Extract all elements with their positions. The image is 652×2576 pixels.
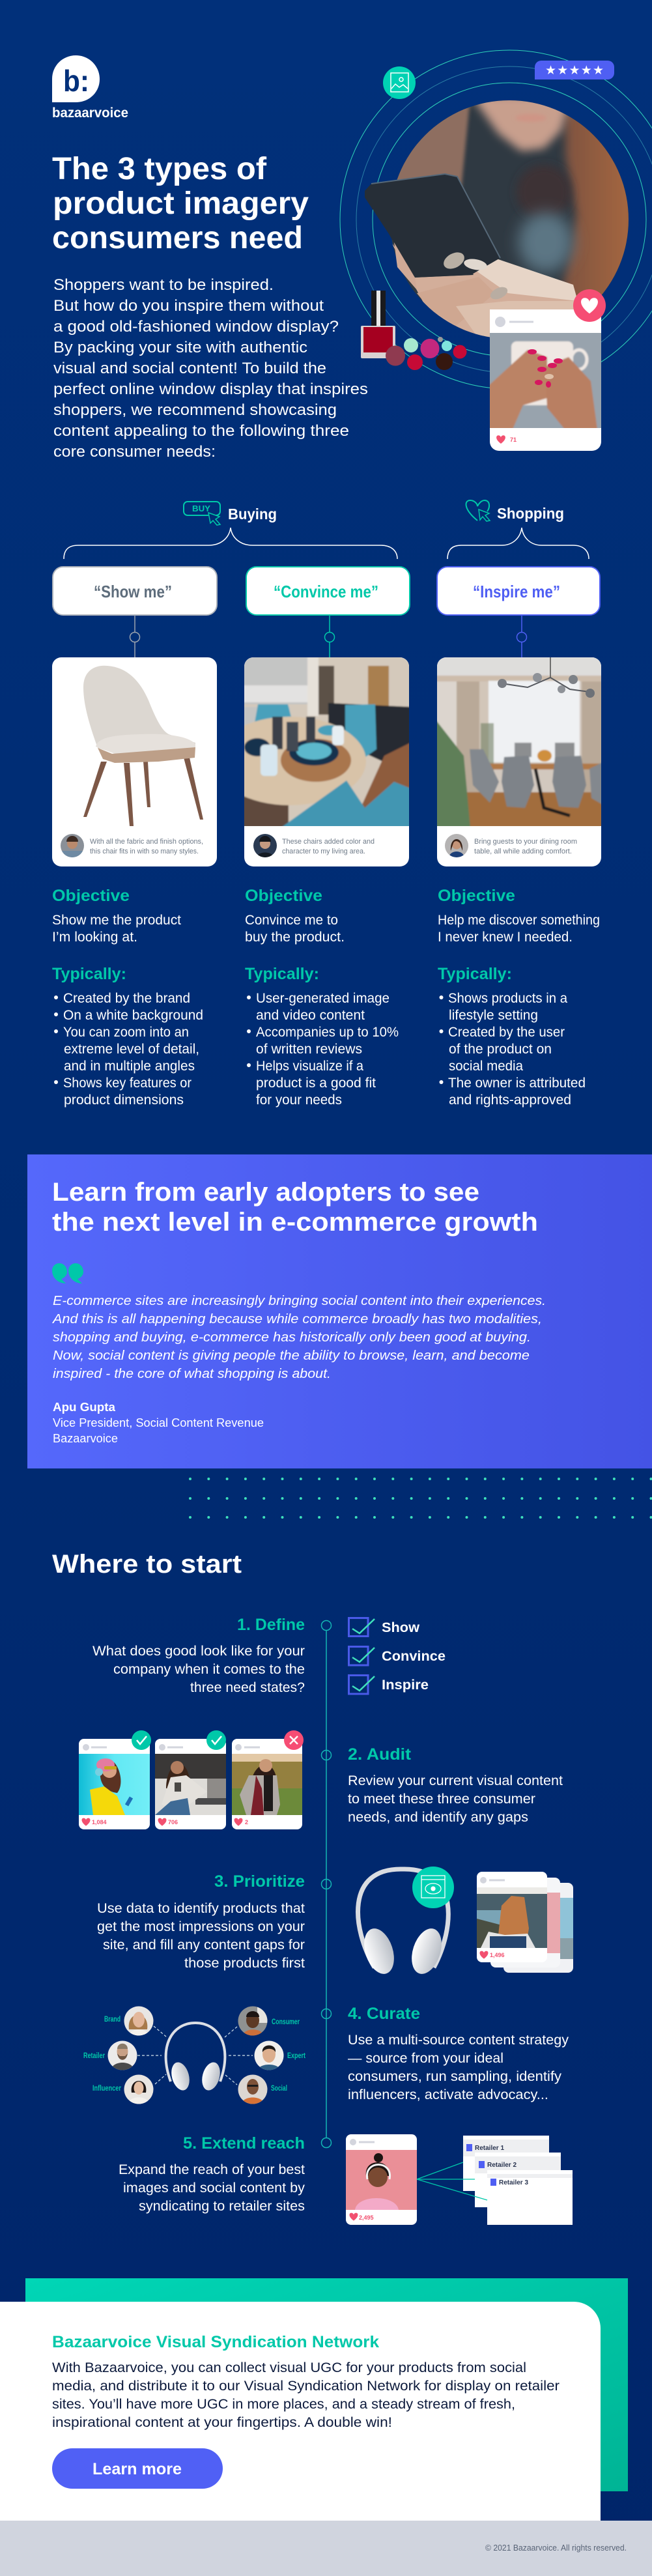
review text [474, 838, 577, 855]
reviewer avatar [61, 834, 84, 859]
box: show me [53, 567, 217, 615]
column: show me text: and in multiple angles [64, 1059, 195, 1074]
column: inspire me text: Help me discover something [438, 913, 600, 928]
column: convince me text: for your needs [256, 1093, 342, 1108]
box: convince me: “Convince me” [274, 582, 378, 601]
icon: image badge [383, 66, 416, 99]
review text: this chair fits in with so many styles. [90, 848, 199, 855]
photo: woman with phone [365, 94, 635, 345]
logo: b: [63, 64, 89, 98]
post card 3 [232, 1730, 304, 1829]
retailer windows [417, 2136, 573, 2225]
column: inspire me text: social media [449, 1059, 523, 1074]
orbit rings [340, 50, 652, 389]
card: product chair [52, 657, 217, 866]
column: inspire me text [438, 887, 600, 1108]
social post card: mug [489, 309, 602, 451]
avatar: consumer [238, 2006, 268, 2036]
column: show me text [52, 887, 203, 1108]
column: inspire me text: Objective [438, 887, 515, 905]
step 3: prioritize [97, 1872, 305, 1971]
heading: Where to start [52, 1550, 242, 1579]
column: show me text: product dimensions [64, 1093, 184, 1108]
panel heading: Learn from early adopters to see [52, 1178, 479, 1207]
social post card: mug: 71 [510, 436, 517, 443]
network description: media, and distribute it to our Visual Syndication Network for display on retailer [52, 2379, 560, 2394]
quote text [52, 1294, 546, 1381]
column: show me text: I’m looking at. [52, 930, 137, 945]
section: where to start [52, 1550, 573, 2225]
checklist: Inspire [382, 1678, 429, 1693]
step 5: extend reach: syndicating to retailer sites [139, 2199, 305, 2214]
column: convince me text: of written reviews [256, 1042, 362, 1057]
step 2: audit [348, 1745, 563, 1825]
column: inspire me text: I never knew I needed. [438, 930, 573, 945]
post card 2: 706 [168, 1819, 178, 1825]
step 1: define: company when it comes to the [113, 1662, 305, 1677]
column: convince me text: and video content [256, 1008, 365, 1023]
intro paragraph: shoppers, we recommend showcasing [53, 401, 337, 419]
bracket: shopping [447, 528, 589, 559]
column: convince me text: Objective [245, 887, 322, 905]
connector: convince me [324, 615, 335, 657]
review text: Bring guests to your dining room [474, 838, 577, 846]
contributors diagram [83, 2006, 305, 2106]
review text [90, 838, 203, 855]
bracket: buying [64, 528, 397, 559]
intro paragraph: a good old-fashioned window display? [53, 318, 339, 336]
retailer window 1 [463, 2136, 549, 2191]
nail polish bottle and swatches [361, 291, 466, 370]
intro paragraph: core consumer needs: [53, 443, 216, 461]
step 1: define [92, 1616, 305, 1695]
column: convince me text: Helps visualize if a [256, 1059, 363, 1074]
post card stack [477, 1872, 573, 1973]
avatar: social [238, 2074, 268, 2104]
post card 3: 2 [245, 1819, 248, 1825]
column: inspire me text: lifestyle setting [449, 1008, 538, 1023]
checklist: Show [382, 1620, 420, 1635]
footer: © 2021 Bazaarvoice. All rights reserved. [485, 2543, 627, 2553]
buying header: Buying [228, 506, 277, 522]
step 1: define: What does good look like for your [92, 1644, 305, 1659]
step 2: audit: Review your current visual content [348, 1773, 563, 1788]
source labels: Brand [104, 2014, 120, 2024]
step 4: curate [348, 2005, 569, 2102]
quote attribution: Vice President, Social Content Revenue [53, 1416, 264, 1429]
syndication lines [417, 2162, 487, 2200]
step 4: curate: — source from your ideal [348, 2051, 503, 2066]
buying header: BUY [192, 504, 210, 513]
intro paragraph [53, 276, 368, 461]
intro paragraph: But how do you inspire them without [53, 297, 324, 315]
column: convince me text: buy the product. [245, 930, 345, 945]
step 5: extend reach: images and social content by [123, 2181, 305, 2196]
source labels [83, 2014, 305, 2093]
icon: quotation marks [52, 1263, 83, 1283]
icon: eye badge [412, 1867, 454, 1908]
syndication post card: 2,495 [359, 2214, 374, 2221]
column: convince me text: Accompanies up to 10% [256, 1025, 399, 1040]
review text [282, 838, 375, 855]
icon: heart badge [573, 289, 606, 322]
column: convince me text: Convince me to [245, 913, 338, 928]
white content card [0, 2302, 601, 2521]
step 5: extend reach: Expand the reach of your best [119, 2162, 305, 2177]
section: three need states [52, 500, 602, 1108]
step 2: audit: needs, and identify any gaps [348, 1810, 528, 1825]
column: inspire me text: Shows products in a [448, 991, 567, 1006]
step 3: prioritize: Use data to identify products that [97, 1901, 305, 1916]
dining room photo [436, 656, 602, 827]
column: show me text: You can zoom into an [63, 1025, 189, 1040]
column: inspire me text: of the product on [449, 1042, 552, 1057]
step 4: curate: 4. Curate [348, 2005, 420, 2023]
shopping header [466, 500, 564, 522]
reviewer avatar [253, 834, 277, 857]
avatar: brand [124, 2006, 154, 2036]
column: inspire me text: and rights-approved [449, 1093, 571, 1108]
box: inspire me [437, 567, 600, 615]
title: The 3 types of [52, 152, 267, 186]
column: show me text: Objective [52, 887, 130, 905]
retailer window 3: Retailer 3 [499, 2179, 528, 2186]
box: convince me [246, 567, 410, 615]
quote text: E-commerce sites are increasingly bringing social content into their experiences. [53, 1294, 546, 1308]
step 3: prioritize: site, and fill any content gaps for [103, 1938, 305, 1953]
step 3: prioritize: those products first [184, 1956, 305, 1971]
buying header [184, 502, 277, 525]
review text: character to my living area. [282, 848, 365, 855]
post card stack: 1,496 [490, 1952, 505, 1958]
logo: bazaarvoice [52, 106, 128, 121]
column: show me text: extreme level of detail, [64, 1042, 199, 1057]
post card 2 [155, 1730, 226, 1829]
reviewer avatar [445, 834, 468, 857]
quote attribution [53, 1401, 264, 1445]
quote text: And this is all happening because while commerce broadly has two modalities, [52, 1312, 542, 1326]
network description: inspirational content at your fingertips. A double win! [52, 2415, 392, 2430]
column: show me text: On a white background [63, 1008, 203, 1023]
title: product imagery [53, 186, 309, 221]
retailer window 2 [475, 2153, 561, 2207]
source labels: Retailer [83, 2051, 105, 2060]
quote attribution: Bazaarvoice [53, 1432, 118, 1445]
column: inspire me text: The owner is attributed [448, 1076, 586, 1091]
timeline [322, 1621, 331, 2147]
shopping header: Shopping [497, 505, 564, 522]
step 4: curate: consumers, run sampling, identify [348, 2069, 562, 2084]
review text: With all the fabric and finish options, [90, 838, 203, 846]
quote attribution: Apu Gupta [53, 1401, 116, 1414]
quote text: inspired - the core of what shopping is about. [53, 1367, 331, 1381]
connector: show me [130, 615, 139, 657]
panel heading: the next level in e-commerce growth [52, 1208, 538, 1237]
intro paragraph: content appealing to the following three [53, 422, 349, 440]
post card 1 [79, 1730, 151, 1829]
network heading: Bazaarvoice Visual Syndication Network [52, 2333, 379, 2351]
dining table photo [244, 657, 409, 826]
connector: inspire me [517, 615, 526, 657]
teal backing panel [25, 2278, 628, 2491]
step 2: audit: 2. Audit [348, 1745, 412, 1764]
step 2: audit: to meet these three consumer [348, 1792, 535, 1807]
title: consumers need [52, 221, 303, 255]
footer [0, 2521, 652, 2576]
panel: visual syndication network [0, 2278, 628, 2521]
avatar: retailer [107, 2040, 137, 2070]
column: show me text: Created by the brand [63, 991, 190, 1006]
step 5: extend reach: 5. Extend reach [183, 2134, 305, 2153]
checklist [349, 1618, 446, 1694]
intro paragraph: By packing your site with authentic [53, 339, 307, 356]
syndication post card [346, 2134, 417, 2225]
box: show me: “Show me” [94, 582, 172, 601]
intro paragraph: perfect online window display that inspires [53, 380, 368, 398]
review text: table, all while adding comfort. [474, 848, 572, 855]
step 3: prioritize: get the most impressions on your [97, 1919, 305, 1934]
panel: early adopters quote [27, 1154, 652, 1468]
network description: sites. You’ll have more UGC in more places, and a steady stream of fresh, [52, 2397, 515, 2412]
retailer window 3 [487, 2170, 573, 2225]
quote text: shopping and buying, e-commerce has historically only been good at buying. [53, 1330, 531, 1345]
source labels: Influencer [92, 2083, 121, 2093]
step 5: extend reach [119, 2134, 305, 2214]
post card 1: 1,084 [92, 1819, 107, 1825]
column: convince me text: Typically: [245, 965, 319, 983]
headphones large [358, 1869, 448, 1978]
column: show me text: Typically: [52, 965, 126, 983]
network description [52, 2360, 560, 2430]
rating pill: ★★★★★ [545, 63, 604, 78]
avatar: expert [254, 2040, 284, 2070]
step 4: curate: influencers, activate advocacy... [348, 2087, 548, 2102]
title [52, 152, 309, 255]
column: convince me text [245, 887, 399, 1108]
network description: With Bazaarvoice, you can collect visual UGC for your products from social [52, 2360, 526, 2375]
chair image [83, 666, 203, 826]
panel heading [52, 1178, 538, 1237]
hero section [52, 50, 652, 461]
column: show me text: Show me the product [52, 913, 181, 928]
headphones small [166, 2023, 225, 2093]
review text: These chairs added color and [282, 838, 375, 846]
avatar: influencer [124, 2074, 154, 2106]
column: inspire me text: Created by the user [448, 1025, 565, 1040]
intro paragraph: Shoppers want to be inspired. [53, 276, 274, 294]
rating pill [535, 61, 614, 79]
column: show me text: Shows key features or [63, 1076, 191, 1091]
column: convince me text: User-generated image [256, 991, 390, 1006]
logo [52, 55, 128, 121]
intro paragraph: visual and social content! To build the [53, 360, 326, 377]
step 4: curate: Use a multi-source content strategy [348, 2033, 569, 2048]
quote text: Now, social content is giving people the ability to browse, learn, and become [53, 1349, 530, 1363]
box: inspire me: “Inspire me” [473, 582, 560, 601]
retailer window 1: Retailer 1 [475, 2145, 504, 2152]
card: lifestyle dining room [436, 656, 602, 866]
source labels: Social [271, 2083, 287, 2093]
step 1: define: three need states? [190, 1680, 305, 1695]
button: learn more: Learn more [92, 2460, 182, 2478]
source labels: Expert [287, 2051, 305, 2060]
card: user photo dining [244, 657, 409, 866]
retailer window 2: Retailer 2 [487, 2162, 517, 2169]
step 1: define: 1. Define [237, 1616, 305, 1634]
social post cards audit [79, 1730, 304, 1829]
step 3: prioritize: 3. Prioritize [214, 1872, 305, 1891]
column: inspire me text: Typically: [438, 965, 512, 983]
column: convince me text: product is a good fit [256, 1076, 376, 1091]
source labels: Consumer [272, 2017, 300, 2026]
checklist: Convince [382, 1649, 446, 1664]
button: learn more [52, 2448, 223, 2489]
